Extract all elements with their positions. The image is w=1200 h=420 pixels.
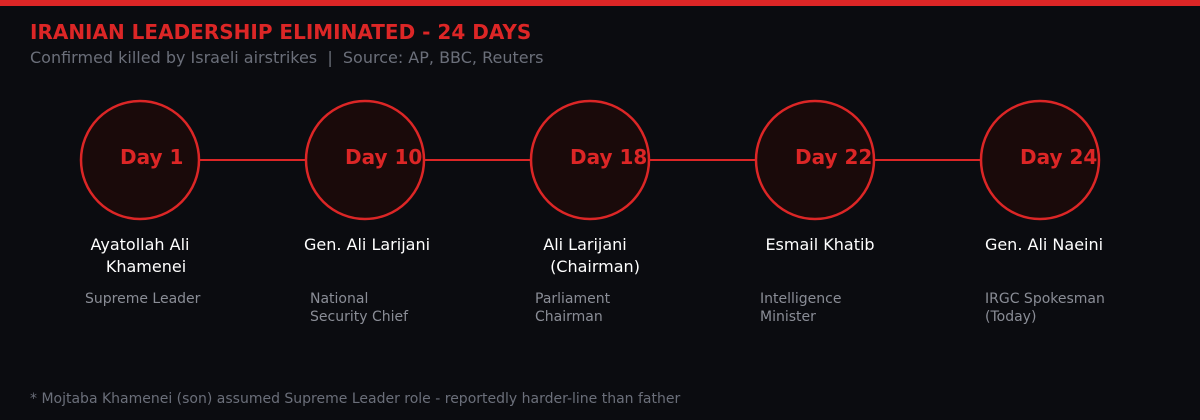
timeline connector line [140, 159, 1040, 161]
subtitle: Confirmed killed by Israeli airstrikes | Source: AP, BBC, Reuters [30, 48, 544, 67]
timeline node: Day 22: Esmail Khatib [765, 235, 875, 254]
timeline node: Day 1: Khamenei [106, 257, 186, 276]
timeline node: Day 18: Parliament [535, 291, 611, 307]
timeline node: Day 22: Intelligence [760, 291, 841, 307]
timeline node: Day 24 [981, 101, 1105, 325]
top accent bar [0, 0, 1200, 6]
timeline node: Day 22: Minister [760, 309, 816, 325]
timeline node: Day 18: Day 18 [570, 145, 647, 169]
timeline node: Day 18: Chairman [535, 309, 603, 325]
timeline node: Day 10: Gen. Ali Larijani [304, 235, 430, 254]
timeline node: Day 24: Gen. Ali Naeini [985, 235, 1103, 254]
timeline node: Day 24: IRGC Spokesman [985, 291, 1105, 307]
timeline node: Day 1 [81, 101, 201, 307]
timeline node: Day 1: Supreme Leader [85, 291, 201, 307]
footnote: * Mojtaba Khamenei (son) assumed Supreme Leader role - reportedly harder-line than father [30, 391, 680, 407]
timeline node: Day 10 [304, 101, 430, 325]
timeline node: Day 10: National [310, 291, 368, 307]
timeline node: Day 24: (Today) [985, 309, 1036, 325]
timeline node: Day 10: Day 10 [345, 145, 422, 169]
title: IRANIAN LEADERSHIP ELIMINATED - 24 DAYS [30, 20, 531, 44]
timeline node: Day 18: Ali Larijani [543, 235, 627, 254]
timeline node: Day 1: Ayatollah Ali [91, 235, 189, 254]
timeline node: Day 24: Day 24 [1020, 145, 1097, 169]
timeline node: Day 10: Security Chief [310, 309, 409, 325]
timeline node: Day 1: Day 1 [120, 145, 183, 169]
timeline node: Day 18 [531, 101, 649, 325]
timeline node: Day 18: (Chairman) [550, 257, 640, 276]
timeline node: Day 22: Day 22 [795, 145, 872, 169]
timeline node: Day 22 [756, 101, 875, 325]
